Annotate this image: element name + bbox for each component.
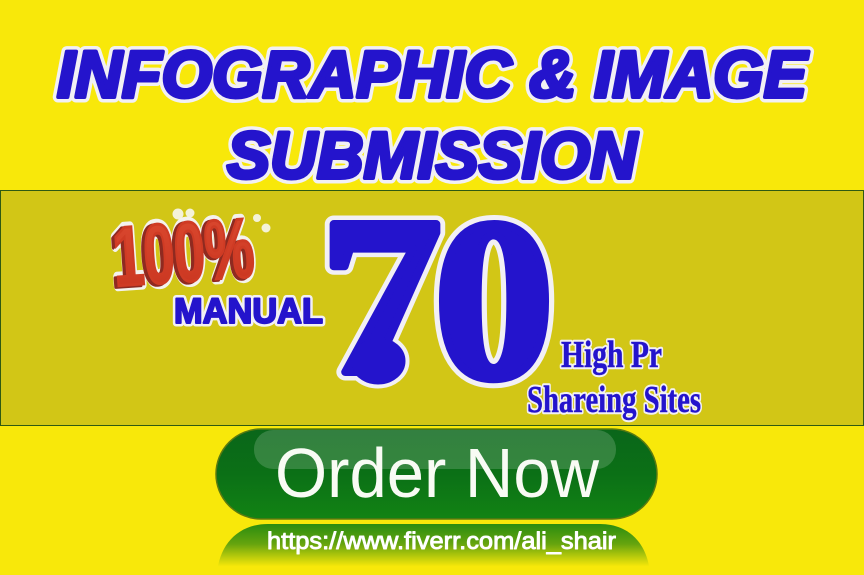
url text: https://www.fiverr.com/ali_shair bbox=[267, 528, 616, 555]
manual label: MANUAL bbox=[174, 292, 323, 331]
button: order now bbox=[216, 429, 657, 519]
panel: offer band bbox=[0, 171, 864, 427]
caption: sharing sites: Shareing Sites bbox=[527, 379, 701, 421]
title line 1: INFOGRAPHIC & IMAGE bbox=[57, 37, 809, 111]
caption: high pr: High Pr bbox=[561, 334, 662, 376]
title line 2: SUBMISSION bbox=[227, 118, 638, 192]
title line 2: SUBMISSION bbox=[227, 118, 638, 192]
title line 1: INFOGRAPHIC & IMAGE bbox=[57, 37, 809, 111]
button highlight bbox=[254, 430, 616, 469]
caption: high pr: High Pr bbox=[561, 334, 662, 376]
button reflection with url bbox=[217, 524, 650, 574]
big number 70: 0 bbox=[434, 172, 554, 427]
100 percent text: 100% bbox=[110, 200, 257, 304]
100 percent text bbox=[107, 200, 257, 305]
big number 70 bbox=[320, 171, 554, 427]
big number 70: 7 bbox=[320, 171, 442, 421]
100 percent text: 100% bbox=[107, 201, 254, 305]
big number 70: 0 bbox=[434, 172, 554, 427]
big number 70: 7 bbox=[320, 171, 442, 421]
icon: 100% badge bbox=[107, 200, 271, 305]
button label: Order Now bbox=[275, 434, 599, 512]
title bbox=[57, 37, 809, 192]
100 percent text: 100% bbox=[109, 200, 256, 304]
caption: sharing sites: Shareing Sites bbox=[527, 379, 701, 421]
manual label: MANUAL bbox=[174, 292, 323, 331]
bubbles bbox=[172, 208, 270, 232]
